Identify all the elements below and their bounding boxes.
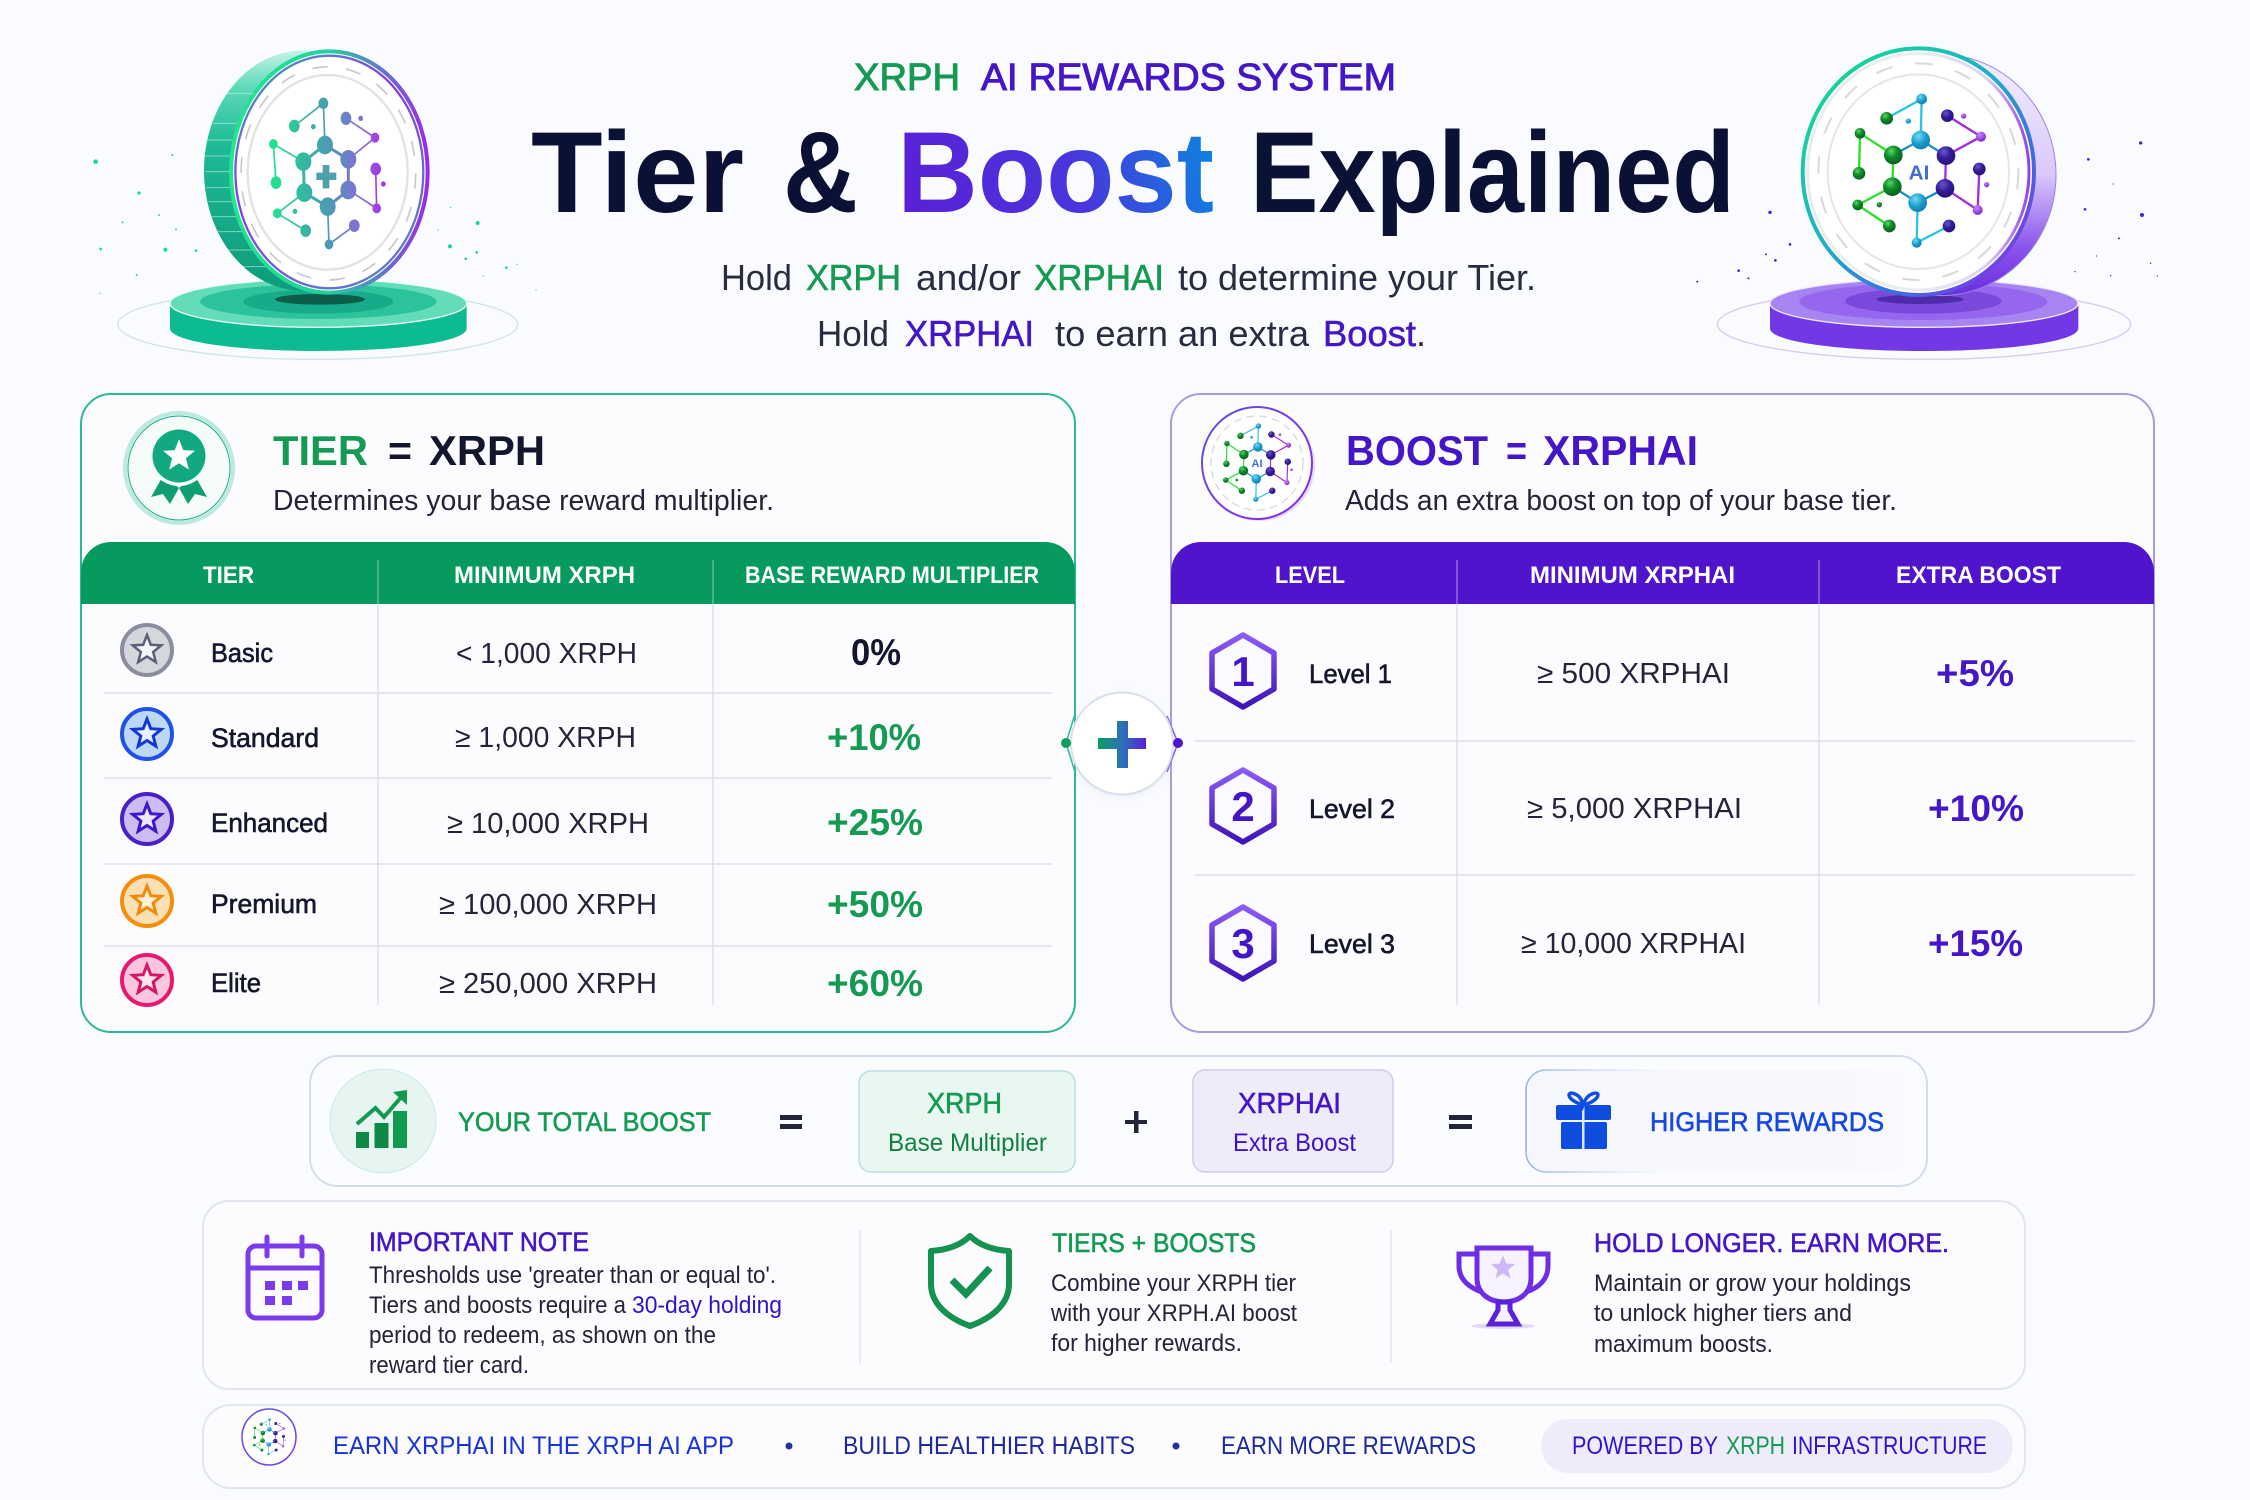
header: subtitle: XRPH: [806, 257, 901, 298]
heading: boost equals XRPHAI: BOOST: [1346, 427, 1488, 474]
text: boost description: Adds an extra boost on top of your base tier.: [1345, 485, 1897, 517]
heading: tier equals XRPH: XRPH: [429, 427, 545, 474]
heading: tier equals XRPH: =: [388, 427, 412, 474]
header: subtitle: .: [1416, 313, 1426, 354]
panel: footer strip: [203, 1405, 2025, 1488]
icon: XRPHAI mini coin: [1202, 407, 1315, 521]
badge: powered by: POWERED BY: [1572, 1432, 1718, 1460]
row: Level 2: [1212, 770, 2024, 842]
badge: powered by: [1541, 1419, 2013, 1473]
row: Premium: [122, 876, 923, 926]
note: hold longer: Maintain or grow your holdings: [1594, 1270, 1911, 1297]
row: Level 3: [1212, 907, 2023, 979]
row: Elite: Elite: [211, 968, 261, 998]
illustration: XRPHAI coin on purple platform: AI: [1909, 161, 1929, 184]
row: Standard: Standard: [211, 723, 319, 753]
header: subtitle: Hold: [817, 313, 889, 354]
note: tiers plus boosts: [1050, 1228, 1297, 1357]
operator: equals: [780, 1115, 802, 1129]
header: subtitle: XRPHAI: [1034, 257, 1164, 298]
card: XRPHAI extra boost: XRPHAI: [1238, 1088, 1341, 1120]
note: important note: period to redeem, as shown on the: [369, 1322, 716, 1349]
icon: calendar: [248, 1237, 322, 1318]
note: tiers plus boosts: for higher rewards.: [1051, 1330, 1242, 1357]
row: Enhanced: [122, 794, 923, 844]
header: main title: Tier: [531, 109, 744, 237]
row: Elite: ≥ 250,000 XRPH: [439, 968, 657, 1000]
heading: boost equals XRPHAI: [1346, 427, 1698, 474]
icon: small XRPHAI coin: [242, 1409, 296, 1465]
row: Level 2: +10%: [1928, 788, 2024, 829]
row: Level 1: Level 1: [1309, 659, 1392, 689]
note: important note: IMPORTANT NOTE: [369, 1227, 589, 1257]
row: Standard: +10%: [827, 717, 921, 758]
icon: shield: [931, 1236, 1009, 1326]
header: subtitle: Hold: [721, 257, 792, 298]
row: Level 1: 1: [1231, 648, 1255, 695]
row: Basic: < 1,000 XRPH: [456, 638, 637, 670]
header: eyebrow title: AI REWARDS SYSTEM: [981, 57, 1396, 99]
row: Elite: +60%: [827, 963, 923, 1004]
note: hold longer: maximum boosts.: [1594, 1331, 1773, 1358]
table header: boost: [1171, 542, 2154, 604]
table header: boost: MINIMUM XRPHAI: [1530, 562, 1735, 589]
note: important note: [369, 1227, 782, 1379]
row: Level 2: ≥ 5,000 XRPHAI: [1527, 793, 1742, 825]
header: subtitle: XRPHAI: [905, 313, 1034, 354]
row: Level 1: [1212, 635, 2014, 707]
row: Basic: [122, 625, 901, 675]
row: Enhanced: ≥ 10,000 XRPH: [447, 808, 649, 840]
table header: boost: LEVEL: [1275, 562, 1345, 589]
text: earn more rewards: EARN MORE REWARDS: [1221, 1432, 1476, 1460]
icon: medal: [125, 413, 233, 523]
connector: plus sign between panels: [1061, 692, 1183, 795]
heading: tier equals XRPH: TIER: [273, 427, 368, 474]
illustration: XRPH coin on green platform: [93, 51, 537, 359]
card: higher rewards: [1526, 1070, 1922, 1172]
table header: tier: TIER: [203, 562, 254, 589]
operator: equals: [1449, 1115, 1472, 1129]
badge: powered by: INFRASTRUCTURE: [1792, 1432, 1987, 1460]
panel: total boost formula: [310, 1056, 1927, 1186]
row: Enhanced: +25%: [827, 802, 923, 843]
icon: growth chart: [330, 1069, 436, 1173]
row: Level 1: +5%: [1936, 653, 2014, 694]
header: subtitle: [721, 257, 1536, 354]
note: tiers plus boosts: with your XRPH.AI boost: [1050, 1300, 1297, 1327]
card: XRPHAI extra boost: [1193, 1070, 1393, 1172]
operator: plus: [1125, 1111, 1147, 1133]
note: important note: Tiers and boosts require a: [369, 1292, 627, 1319]
note: important note: reward tier card.: [369, 1352, 529, 1379]
panel: notes: [203, 1201, 2025, 1389]
row: Level 2: 2: [1231, 783, 1255, 830]
note: hold longer: [1594, 1228, 1949, 1358]
row: Basic: 0%: [851, 632, 901, 673]
row: Elite: [122, 955, 923, 1005]
label: your total boost: YOUR TOTAL BOOST: [458, 1107, 711, 1137]
heading: boost equals XRPHAI: XRPHAI: [1543, 427, 1698, 474]
row: Premium: +50%: [827, 884, 923, 925]
badge: powered by: XRPH: [1726, 1432, 1785, 1460]
row: Standard: ≥ 1,000 XRPH: [455, 722, 636, 754]
row: Level 3: +15%: [1928, 923, 2023, 964]
icon: trophy: [1459, 1248, 1548, 1329]
table header: tier: MINIMUM XRPH: [454, 562, 635, 589]
row: Level 3: ≥ 10,000 XRPHAI: [1521, 928, 1746, 960]
note: tiers plus boosts: TIERS + BOOSTS: [1052, 1228, 1256, 1258]
text: earn XRPHAI in the app: EARN XRPHAI IN THE XRPH AI APP: [333, 1432, 734, 1460]
icon: gift: [1556, 1093, 1611, 1149]
card: XRPH base multiplier: [859, 1071, 1075, 1172]
note: hold longer: HOLD LONGER. EARN MORE.: [1594, 1228, 1949, 1258]
panel: boost: [1171, 394, 2154, 1032]
header: main title: &: [783, 109, 858, 237]
card: XRPH base multiplier: XRPH: [927, 1088, 1002, 1120]
note: hold longer: to unlock higher tiers and: [1594, 1300, 1852, 1327]
table header: boost: EXTRA BOOST: [1896, 562, 2061, 589]
row: Premium: Premium: [211, 889, 317, 919]
text: tier description: Determines your base reward multiplier.: [273, 485, 774, 517]
panel: tier: [81, 394, 1075, 1032]
row: Level 1: ≥ 500 XRPHAI: [1537, 658, 1730, 690]
note: important note: Thresholds use 'greater than or equal to'.: [369, 1262, 776, 1289]
card: XRPHAI extra boost: Extra Boost: [1233, 1129, 1356, 1157]
header: subtitle: Boost: [1323, 313, 1416, 354]
row: Premium: ≥ 100,000 XRPH: [439, 889, 657, 921]
row: Level 2: Level 2: [1309, 794, 1395, 824]
text: build healthier habits: BUILD HEALTHIER HABITS: [843, 1432, 1135, 1460]
header: main title: [531, 109, 1735, 237]
header: subtitle: to determine your Tier.: [1178, 257, 1536, 298]
table header: tier: BASE REWARD MULTIPLIER: [745, 562, 1039, 589]
heading: tier equals XRPH: [273, 427, 545, 474]
table header: tier: [81, 542, 1075, 604]
header: main title: Boost: [897, 109, 1214, 237]
header: subtitle: and/or: [916, 257, 1021, 298]
note: tiers plus boosts: Combine your XRPH tier: [1051, 1270, 1296, 1297]
row: Standard: [122, 709, 921, 759]
icon: XRPHAI mini coin: AI: [1252, 458, 1262, 470]
card: XRPH base multiplier: Base Multiplier: [888, 1129, 1047, 1157]
header: subtitle: to earn an extra: [1055, 313, 1310, 354]
note: important note: 30-day holding: [632, 1292, 782, 1319]
card: higher rewards: HIGHER REWARDS: [1650, 1107, 1884, 1137]
illustration: XRPHAI coin on purple platform: [1696, 48, 2158, 359]
header: eyebrow title: XRPH: [854, 57, 960, 99]
row: Enhanced: Enhanced: [211, 808, 328, 838]
row: Level 3: Level 3: [1309, 929, 1395, 959]
row: Level 3: 3: [1231, 920, 1255, 967]
row: Basic: Basic: [211, 638, 273, 668]
heading: boost equals XRPHAI: =: [1506, 427, 1527, 474]
header: main title: Explained: [1250, 109, 1735, 237]
